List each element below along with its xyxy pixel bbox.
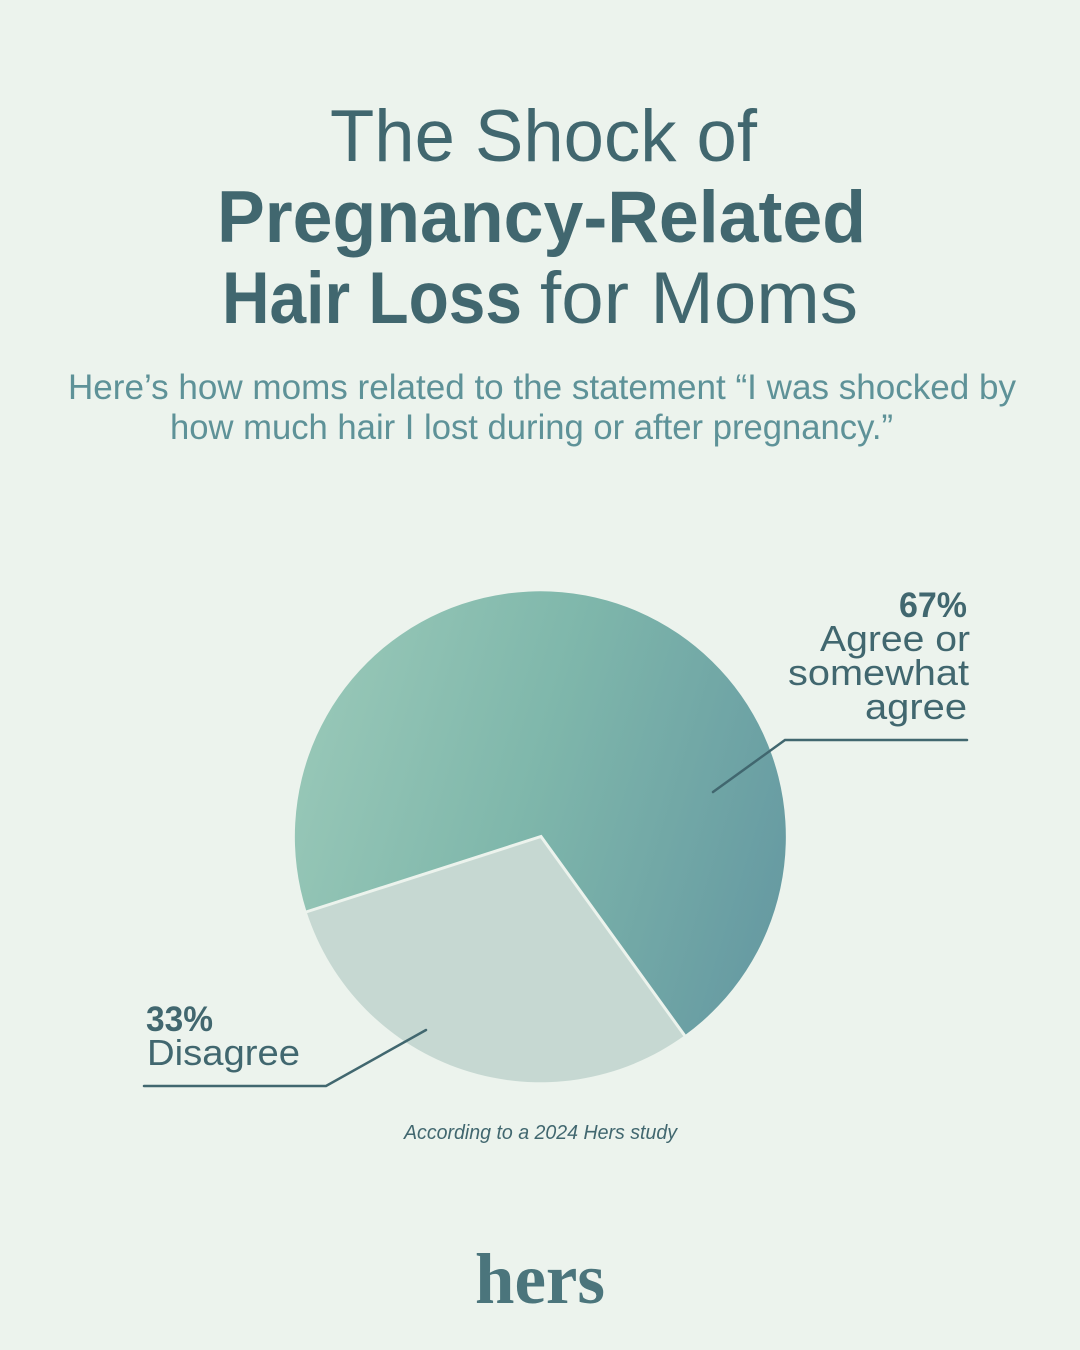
subtitle [68,368,1016,447]
leader line: 33% [144,1030,426,1086]
leader line: 67% [713,740,967,792]
slice separator [306,836,685,1036]
label: 33% disagree: Disagree [147,1032,300,1073]
label: 67% agree or somewhat agree: agree [865,686,967,727]
logo: hers: hers [475,1239,605,1319]
subtitle: how much hair I lost during or after pregnancy.” [170,408,893,447]
title: The Shock of [330,96,758,177]
label: 33% disagree [146,1000,300,1073]
label: 67% agree or somewhat agree [788,586,970,727]
subtitle: Here’s how moms related to the statement “I was shocked by [68,368,1016,407]
title [217,96,866,339]
source note: According to a 2024 Hers study [403,1122,678,1144]
title: Pregnancy-Related [217,177,866,258]
label: 67% agree or somewhat agree: somewhat [788,652,969,693]
slice: 33% disagree [306,836,684,1082]
slice: 67% agree or somewhat agree [295,591,786,1036]
label: 67% agree or somewhat agree: Agree or [820,618,970,659]
title: Hair Loss [222,258,522,339]
label: 67% agree or somewhat agree: 67% [899,586,967,625]
pie chart [295,591,786,1082]
title: for Moms [540,258,858,339]
label: 33% disagree: 33% [146,1000,213,1039]
